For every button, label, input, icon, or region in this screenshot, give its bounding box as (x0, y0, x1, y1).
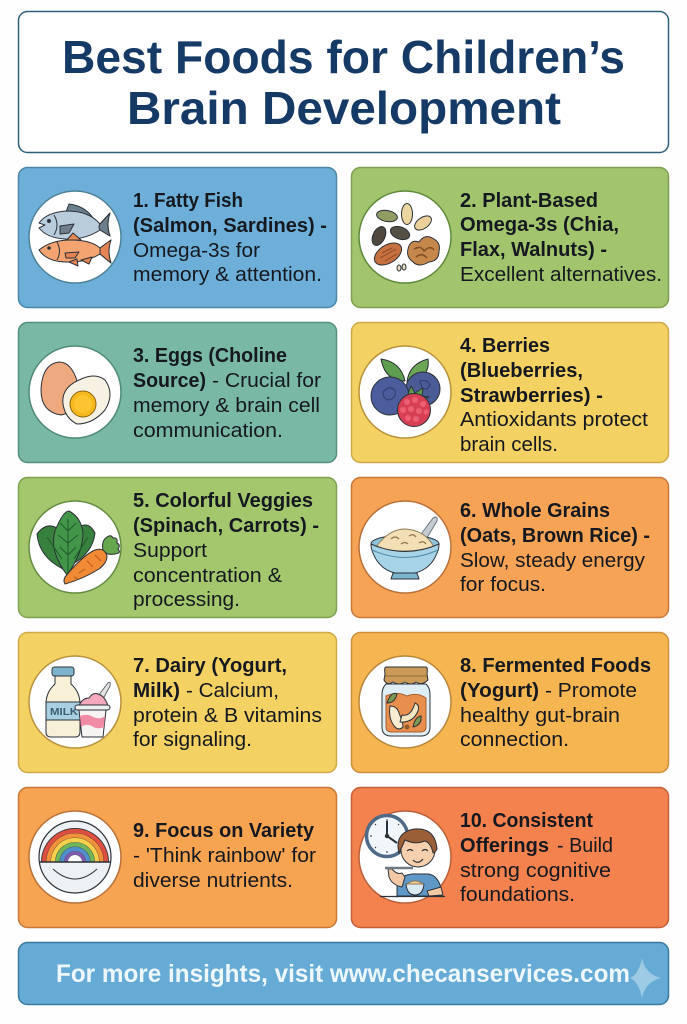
text: item 8: - Promote (545, 680, 637, 702)
icon: clock and child eating (359, 811, 451, 903)
text: item 5: concentration & (133, 565, 283, 587)
text: item 8: (Yogurt) (460, 680, 539, 702)
footer banner (18, 942, 668, 1004)
title: Best Foods for Children’s (62, 31, 625, 83)
text: item 9 (133, 820, 316, 892)
icon: eggs (29, 346, 121, 438)
text: item 3: Source) (133, 370, 206, 392)
icon: bowl of oats (359, 501, 451, 593)
icon: sparkle (630, 958, 661, 998)
text: item 8 (460, 655, 651, 751)
text: item 10: foundations. (460, 884, 575, 906)
text: item 1: memory & attention. (133, 264, 322, 286)
text: item 7: protein & B vitamins (133, 705, 322, 727)
text: item 6: (Oats, Brown Rice) - (460, 525, 650, 547)
text: item 5: (Spinach, Carrots) - (133, 515, 319, 537)
icon: seeds and nuts (359, 191, 451, 283)
panel: 9 focus on variety (18, 788, 336, 928)
icon: milk and yogurt: MILK (50, 706, 78, 718)
icon: spinach and carrot (29, 501, 121, 593)
text: item 7: for signaling. (133, 729, 252, 751)
text: item 9: 9. Focus on Variety (133, 820, 315, 842)
footer text: For more insights, visit www.checanservices.com (56, 960, 630, 988)
text: item 8: connection. (460, 729, 569, 751)
text: item 4: Antioxidants protect (460, 409, 648, 431)
text: item 1: (Salmon, Sardines) - (133, 215, 327, 237)
text: item 7: 7. Dairy (Yogurt, (133, 655, 287, 677)
text: item 5: processing. (133, 589, 240, 611)
text: item 3: communication. (133, 420, 283, 442)
text: item 4: Strawberries) - (460, 385, 603, 407)
text: item 3: 3. Eggs (Choline (133, 345, 287, 367)
text: item 2: Omega-3s (Chia, (460, 214, 619, 236)
panel: 1 fatty fish (18, 168, 336, 308)
icon: fermented jar (359, 656, 451, 748)
text: item 5: 5. Colorful Veggies (133, 490, 313, 512)
text: item 2 (460, 190, 662, 286)
text: item 1: Omega-3s for (133, 240, 260, 262)
text: item 4: 4. Berries (460, 335, 550, 357)
panel: 4 berries (352, 322, 668, 462)
panel: 5 colorful veggies (18, 478, 336, 618)
text: item 7 (133, 655, 322, 751)
title: Brain Development (127, 82, 561, 134)
text: item 7: Milk) (133, 680, 180, 702)
text: item 10: - Build (557, 835, 613, 857)
panel: 7 dairy (18, 632, 336, 772)
panel: 10 consistent offerings (352, 788, 668, 928)
text: item 10: 10. Consistent (460, 810, 593, 832)
text: item 10: strong cognitive (460, 860, 611, 882)
text: item 7: - Calcium, (186, 680, 279, 702)
text: item 6: 6. Whole Grains (460, 500, 610, 522)
panel: 2 plant-based omega-3s (352, 168, 668, 308)
text: item 2: 2. Plant-Based (460, 190, 598, 212)
text: item 3: - Crucial for (212, 370, 321, 392)
text: item 5: Support (133, 540, 207, 562)
text: item 2: Flax, Walnuts) - (460, 239, 607, 261)
text: item 9: - 'Think rainbow' for (133, 845, 316, 867)
text: item 4 (460, 335, 648, 456)
icon: rainbow plate (29, 811, 121, 903)
text: item 9: diverse nutrients. (133, 870, 293, 892)
icon: milk and yogurt (29, 656, 121, 748)
text: item 8: 8. Fermented Foods (460, 655, 651, 677)
text: item 3 (133, 345, 321, 442)
text: item 4: brain cells. (460, 434, 558, 456)
text: item 2: Excellent alternatives. (460, 264, 662, 286)
text: item 3: memory & brain cell (133, 395, 320, 417)
title (62, 31, 625, 134)
icon: berries (359, 346, 451, 438)
text: item 6: Slow, steady energy (460, 550, 645, 572)
title panel (18, 12, 668, 152)
panel: 8 fermented foods (352, 632, 668, 772)
text: item 6 (460, 500, 650, 596)
text: item 1 (133, 190, 327, 286)
text: item 6: for focus. (460, 574, 546, 596)
icon: fish (29, 191, 121, 283)
text: item 10 (460, 810, 613, 906)
text: item 4: (Blueberries, (460, 360, 583, 382)
text: item 10: Offerings (460, 835, 549, 857)
panel: 3 eggs (18, 322, 336, 462)
text: item 5 (133, 490, 319, 611)
panel: 6 whole grains (352, 478, 668, 618)
text: item 8: healthy gut-brain (460, 705, 620, 727)
text: item 1: 1. Fatty Fish (133, 190, 243, 212)
